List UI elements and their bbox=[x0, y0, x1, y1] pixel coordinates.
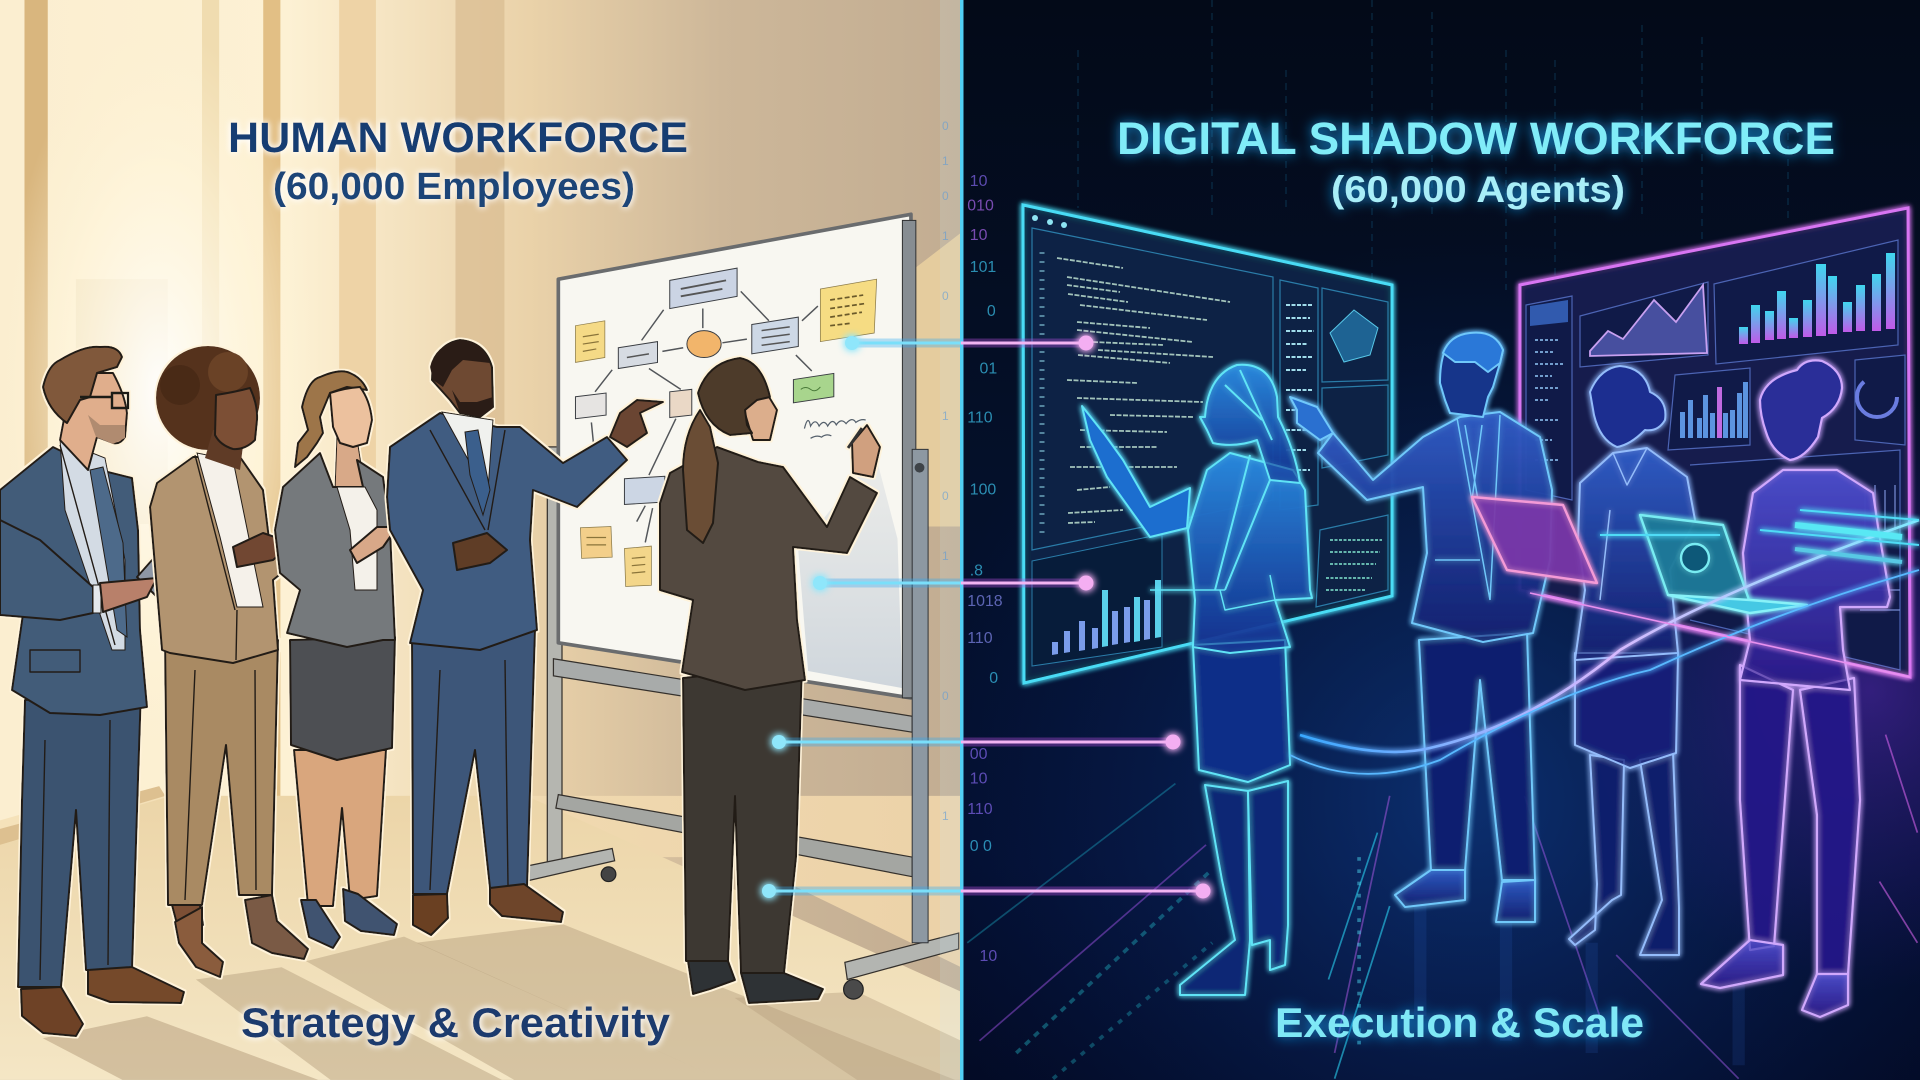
perspective floor lines bbox=[967, 735, 1917, 1079]
caption: strategy and creativity: Strategy & Creativity bbox=[241, 999, 671, 1046]
holographic worker: woman with laptop bbox=[1569, 366, 1695, 955]
binary digits near divider: 0 bbox=[942, 189, 949, 203]
person: woman in grey blazer bbox=[275, 371, 397, 948]
light data stream bbox=[1290, 510, 1919, 774]
title: digital shadow workforce: DIGITAL SHADOW WORKFORCE bbox=[1117, 113, 1835, 164]
sticky notes bbox=[575, 279, 877, 586]
holographic screen: analytics dashboard bbox=[1520, 208, 1910, 677]
holographic worker: woman in purple with laptop bbox=[1701, 360, 1890, 1017]
person: man with glasses and tablet bbox=[0, 347, 215, 1036]
subtitle: 60,000 employees: (60,000 Employees) bbox=[273, 166, 635, 208]
person: woman in tan blazer bbox=[150, 346, 372, 977]
main bar chart bbox=[1739, 253, 1895, 344]
binary digits near divider: 1 bbox=[942, 409, 949, 423]
binary digits near divider: 1 bbox=[942, 549, 949, 563]
binary digits near divider: 0 bbox=[942, 489, 949, 503]
connector line 3 bbox=[772, 734, 1180, 750]
binary code columns: 101 bbox=[970, 259, 996, 276]
gauge bbox=[1857, 377, 1897, 417]
binary code columns: 0 bbox=[989, 670, 998, 687]
binary digits near divider: 1 bbox=[942, 229, 949, 243]
connector line 4 bbox=[762, 884, 1210, 898]
binary code columns: 0 bbox=[987, 303, 996, 320]
binary digits near divider: 0 bbox=[942, 689, 949, 703]
binary code columns: 110 bbox=[967, 630, 993, 647]
dark digital background bbox=[961, 0, 1920, 1080]
handwriting on whiteboard bbox=[804, 420, 866, 438]
holographic screen: code editor bbox=[1023, 205, 1392, 683]
binary code columns: .8 bbox=[970, 562, 983, 579]
area chart bbox=[1590, 285, 1707, 356]
binary code columns bbox=[967, 173, 1003, 965]
binary code columns: 10 bbox=[970, 227, 988, 244]
holographic worker: woman pointing bbox=[1082, 365, 1312, 995]
connector line 2 bbox=[813, 576, 1094, 590]
small bar chart on code screen bbox=[1032, 534, 1162, 666]
panel: human workforce office scene bbox=[0, 0, 961, 1080]
binary code columns: 010 bbox=[967, 198, 994, 215]
flowchart on whiteboard bbox=[575, 268, 834, 542]
office room background bbox=[0, 0, 961, 1080]
caption: execution and scale: Execution & Scale bbox=[1275, 999, 1644, 1046]
binary code columns: 0 0 bbox=[970, 838, 992, 855]
binary code columns: 1018 bbox=[967, 593, 1003, 610]
binary code columns: 01 bbox=[980, 360, 997, 377]
person: man in navy suit pointing bbox=[387, 340, 663, 935]
binary code columns: 100 bbox=[970, 482, 996, 499]
holographic laptops bbox=[1472, 497, 1807, 613]
central divider line bbox=[940, 0, 964, 1080]
binary digits near divider bbox=[942, 119, 949, 823]
binary code columns: 10 bbox=[980, 948, 997, 965]
binary digits near divider: 1 bbox=[942, 154, 949, 168]
binary digits near divider: 1 bbox=[942, 809, 949, 823]
binary code columns: 10 bbox=[970, 771, 988, 788]
binary digits near divider: 0 bbox=[942, 119, 949, 133]
binary code columns: 10 bbox=[970, 173, 988, 190]
radar chart bbox=[1330, 310, 1378, 362]
small bar chart bbox=[1680, 382, 1748, 438]
subtitle: 60,000 agents: (60,000 Agents) bbox=[1331, 169, 1625, 210]
binary code columns: 110 bbox=[967, 409, 993, 426]
whiteboard on stand bbox=[523, 214, 959, 999]
connector line 1 bbox=[845, 336, 1094, 350]
binary code columns: 110 bbox=[967, 801, 993, 818]
panel: digital shadow workforce scene bbox=[961, 0, 1920, 1080]
binary digits near divider: 0 bbox=[942, 289, 949, 303]
person: woman writing on whiteboard bbox=[660, 358, 880, 1003]
binary code columns: 00 bbox=[970, 746, 988, 763]
holographic worker: man pointing bbox=[1290, 333, 1552, 922]
title: human workforce: HUMAN WORKFORCE bbox=[228, 114, 688, 162]
code lines bbox=[1057, 258, 1230, 523]
